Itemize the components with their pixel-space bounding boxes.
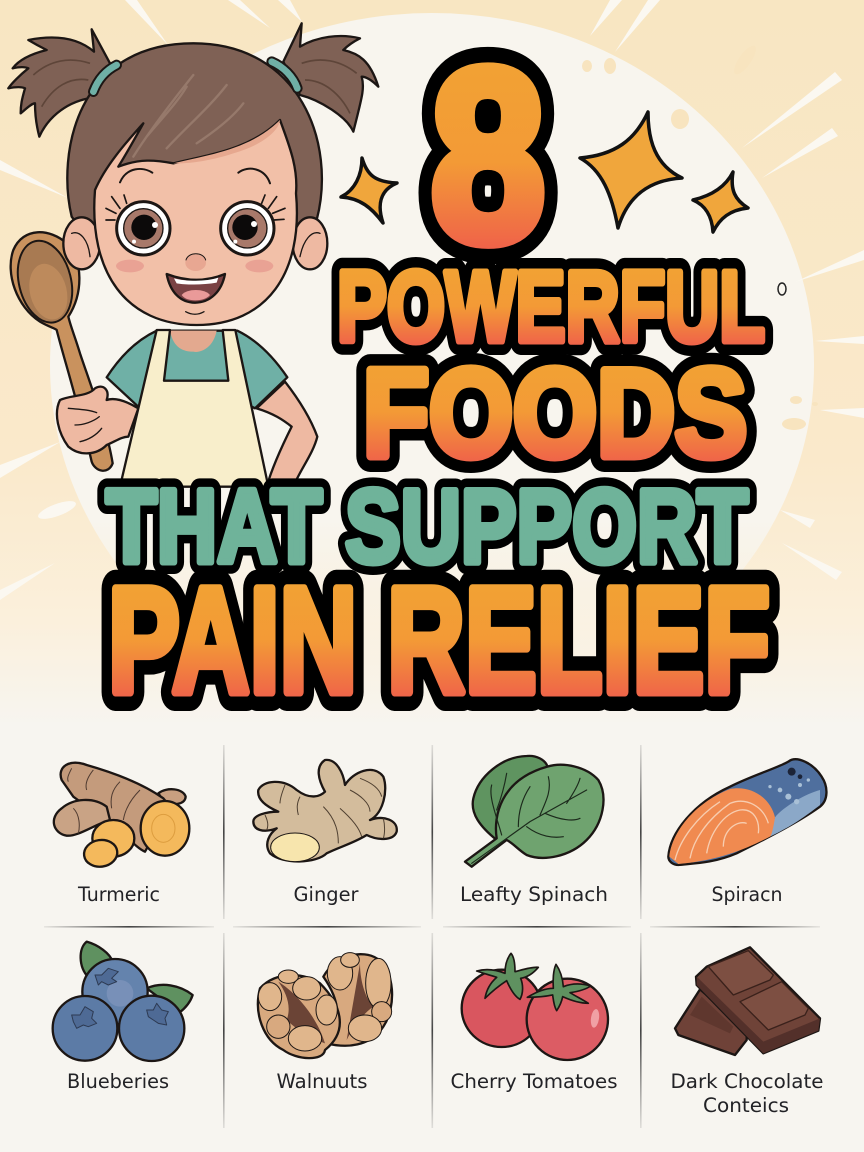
icon: dark chocolate xyxy=(675,947,820,1055)
right pigtail xyxy=(283,23,378,132)
label: leafty spinach: Leafty Spinach xyxy=(460,883,608,906)
icon: cherry tomatoes xyxy=(462,953,608,1060)
icon: right star xyxy=(693,172,748,232)
title numeral 8: 8 xyxy=(430,18,546,292)
label: blueberies: Blueberies xyxy=(67,1070,169,1093)
icon: salmon xyxy=(668,759,826,865)
icon: walnuts xyxy=(258,953,392,1058)
hair ties xyxy=(93,62,297,92)
label: dark chocolate conteics: Conteics xyxy=(703,1094,789,1117)
left pigtail xyxy=(8,29,110,137)
icon: spinach leaf xyxy=(465,756,603,867)
eyes xyxy=(106,195,285,255)
face xyxy=(94,120,297,325)
title line: FOODS: FOODS xyxy=(363,345,747,483)
girl chef character xyxy=(8,23,378,487)
mouth xyxy=(167,274,225,314)
label: ginger: Ginger xyxy=(294,883,359,906)
ears xyxy=(63,217,327,269)
label: turmeric: Turmeric xyxy=(77,883,160,906)
icon: ginger xyxy=(253,760,397,862)
right arm xyxy=(257,382,317,487)
icon: big star xyxy=(580,112,682,228)
hair xyxy=(67,43,322,253)
label: walnuuts: Walnuuts xyxy=(276,1070,368,1093)
sunburst disc xyxy=(0,0,864,717)
title numeral 8: 8 xyxy=(430,18,546,292)
apron xyxy=(120,330,268,487)
t-shirt sleeves xyxy=(107,331,287,408)
nose xyxy=(185,254,206,271)
label: cherry tomatoes: Cherry Tomatoes xyxy=(450,1070,618,1093)
label: dark chocolate conteics xyxy=(670,1070,824,1117)
label: dark chocolate conteics: Dark Chocolate xyxy=(670,1070,824,1093)
icon: turmeric xyxy=(54,763,189,869)
icon: left star xyxy=(341,158,397,223)
left arm and hand xyxy=(57,387,138,453)
panel: food grid xyxy=(53,756,826,1117)
hair streaks xyxy=(133,75,243,157)
icon: wooden spoon xyxy=(10,232,113,471)
icon: blueberries xyxy=(53,942,193,1061)
cheeks xyxy=(116,260,273,272)
title xyxy=(106,18,770,724)
label: spiracn: Spiracn xyxy=(712,883,782,906)
title line: FOODS: FOODS xyxy=(363,345,747,483)
